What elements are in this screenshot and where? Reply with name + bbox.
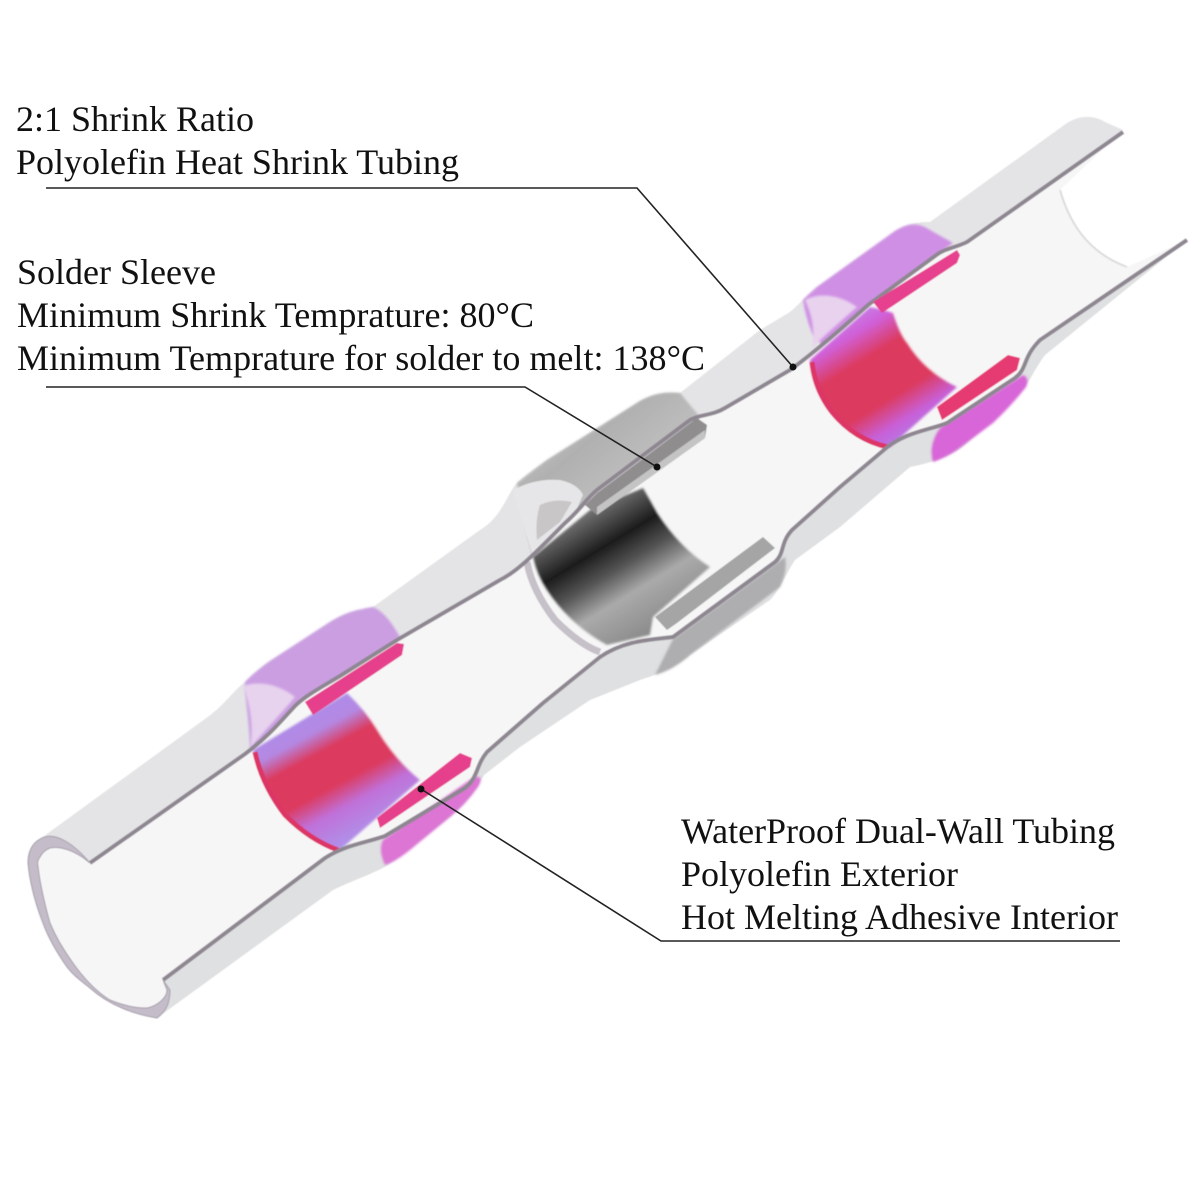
left ring lower tab [377, 753, 472, 828]
text: melt temperature: Minimum Temprature for solder to melt: 138°C [17, 338, 705, 378]
right pink ring [803, 224, 1027, 462]
upper wall strip [40, 117, 1123, 863]
leader line: dual wall [421, 789, 1120, 941]
text: polyolefin tubing: Polyolefin Heat Shrink Tubing [16, 142, 459, 182]
metal solder sleeve [513, 393, 786, 675]
heading: waterproof tubing: WaterProof Dual-Wall Tubing [681, 811, 1115, 851]
left ring upper shell [245, 607, 400, 752]
upper cut edge [90, 132, 1123, 863]
solder sleeve opening [536, 501, 572, 540]
leader dot: solder [654, 464, 660, 470]
left ring inner band [253, 693, 420, 850]
callout: dual wall tubing [418, 786, 1120, 941]
leader dot: tubing [790, 364, 796, 370]
right ring lower shell [932, 375, 1027, 462]
left ring rim [255, 752, 338, 850]
right ring crescent highlight [805, 296, 857, 348]
right ring lower tab [937, 355, 1020, 420]
tabs [305, 250, 1020, 828]
left ring crescent highlight [243, 683, 295, 748]
right ring upper shell [803, 224, 953, 345]
solder sleeve end face [513, 480, 583, 556]
solder sleeve inner band [533, 488, 710, 645]
right ring upper tab [873, 250, 960, 313]
leader dot: dual wall [418, 786, 424, 792]
tube end opening ring [28, 836, 170, 1018]
solder sleeve upper shell [517, 393, 700, 557]
text: exterior: Polyolefin Exterior [681, 854, 958, 894]
far end inner arc [1060, 190, 1127, 267]
lower wall strip [157, 240, 1187, 1018]
leader line: tubing [46, 188, 793, 367]
left ring lower shell [381, 777, 481, 865]
solder sleeve upper tab [585, 418, 707, 515]
solder sleeve lower tab [655, 537, 775, 630]
solder sleeve upper tab side [597, 430, 705, 515]
left ring upper tab [305, 643, 404, 715]
solder sleeve inner rim [527, 562, 600, 652]
callout: solder sleeve [17, 252, 705, 470]
heading: solder sleeve: Solder Sleeve [17, 252, 216, 292]
solder sleeve lower shell [655, 557, 786, 675]
lower cut edge [163, 240, 1187, 980]
tube body interior [28, 117, 1187, 1018]
tube connector [28, 117, 1187, 1018]
right ring inner band [810, 307, 957, 447]
text: shrink temperature: Minimum Shrink Temprature: 80°C [17, 295, 534, 335]
text: interior: Hot Melting Adhesive Interior [681, 897, 1118, 937]
right ring rim [812, 362, 888, 447]
leader line: solder [46, 387, 657, 467]
left pink ring [243, 607, 481, 865]
heading: shrink ratio: 2:1 Shrink Ratio [16, 99, 254, 139]
callout: shrink tubing [16, 99, 796, 370]
